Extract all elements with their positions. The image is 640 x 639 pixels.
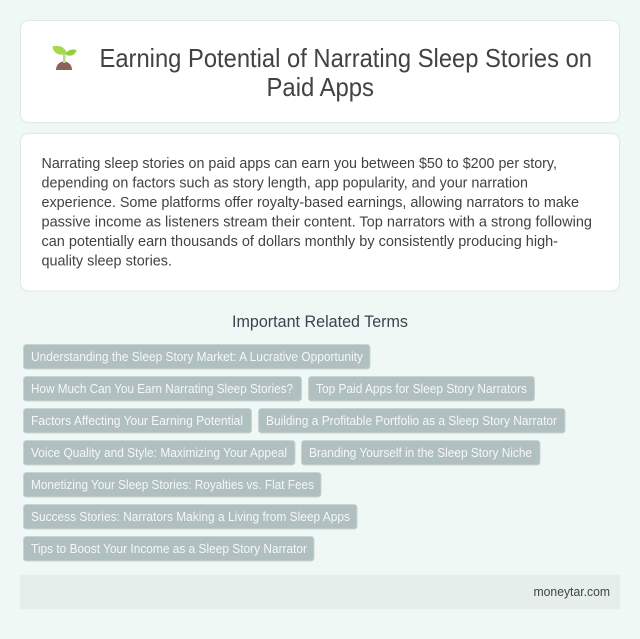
tag: top paid apps: Top Paid Apps for Sleep Story Narrators [316, 381, 527, 396]
tag: factors: Factors Affecting Your Earning Potential [31, 413, 243, 428]
tag: sleep story market [24, 344, 370, 369]
heading: related terms: Important Related Terms [232, 313, 408, 331]
text block: description: Narrating sleep stories on paid apps can earn you between $50 to $200 per story, [42, 156, 557, 172]
tag: how much can you earn [24, 376, 302, 401]
tag: tips [24, 536, 314, 561]
text block: description: passive income as listeners stream their content. Top narrators with a strong following [42, 214, 592, 230]
text block: description [42, 156, 592, 270]
tag: voice quality [24, 440, 295, 465]
title: Paid Apps [266, 72, 374, 102]
panel: title card [20, 20, 620, 122]
tag: voice quality: Voice Quality and Style: Maximizing Your Appeal [31, 445, 287, 460]
tag: factors [24, 408, 252, 433]
text block: description: quality sleep stories. [42, 254, 172, 270]
title [100, 43, 592, 102]
tag: portfolio [258, 408, 565, 433]
footer [20, 575, 620, 609]
text block: description: can potentially earn thousands of dollars monthly by consistently producing high- [42, 234, 558, 250]
tag: how much can you earn: How Much Can You Earn Narrating Sleep Stories? [31, 381, 293, 396]
icon: seedling [52, 46, 76, 70]
tag: sleep story market: Understanding the Sleep Story Market: A Lucrative Opportunity [31, 349, 363, 364]
footer source text: moneytar.com [534, 584, 610, 599]
tag: branding [302, 440, 540, 465]
panel: description [20, 134, 620, 291]
tag: success stories [24, 504, 357, 529]
tag: portfolio: Building a Profitable Portfolio as a Sleep Story Narrator [266, 413, 558, 428]
title: Earning Potential of Narrating Sleep Stories on [100, 43, 592, 73]
tag: branding: Branding Yourself in the Sleep Story Niche [309, 445, 532, 460]
tag: tips: Tips to Boost Your Income as a Sleep Story Narrator [31, 541, 308, 556]
tag: monetizing: Monetizing Your Sleep Stories: Royalties vs. Flat Fees [31, 477, 314, 492]
tag: top paid apps [308, 376, 534, 401]
text block: description: experience. Some platforms offer royalty-based earnings, allowing narrators to make [42, 195, 579, 211]
text block: description: depending on factors such as story length, app popularity, and your narration [42, 176, 528, 192]
tag: monetizing [24, 472, 321, 497]
panel: related term tags [24, 344, 565, 561]
tag: success stories: Success Stories: Narrators Making a Living from Sleep Apps [31, 509, 350, 524]
